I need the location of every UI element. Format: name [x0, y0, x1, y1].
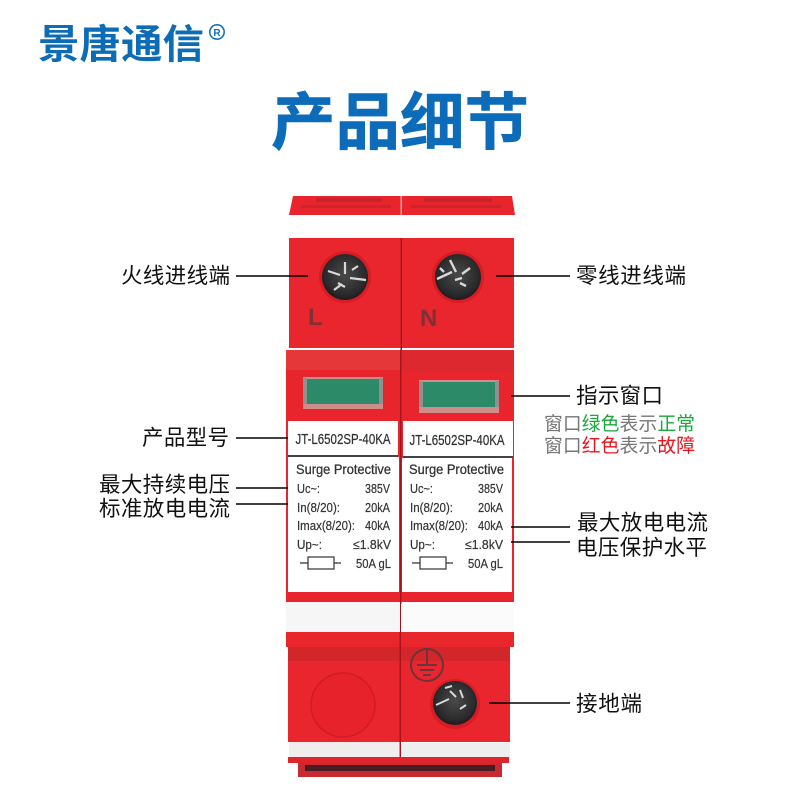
screw: ground terminal — [430, 679, 480, 729]
spec label: left: Imax(8/20): — [297, 518, 355, 533]
callout: 最大放电电流: 最大放电电流 — [577, 511, 708, 535]
logo: 景唐通信: 景唐通信 — [38, 23, 204, 67]
terminal letter L: L — [308, 304, 323, 331]
callout: 标准放电电流: 标准放电电流 — [99, 497, 230, 521]
spec label: left: 20kA — [365, 500, 390, 515]
callout: 零线进线端: 零线进线端 — [576, 264, 686, 288]
spec label: right: Up~: — [410, 537, 435, 552]
bottom ground module — [286, 632, 514, 777]
spec label: left: 40kA — [365, 518, 390, 533]
model label: left — [288, 421, 398, 457]
spec label: right: ≤1.8kV — [465, 537, 503, 552]
callout: 最大持续电压: 最大持续电压 — [99, 473, 230, 497]
logo: 景唐通信: R — [213, 28, 221, 39]
spec label: left — [288, 457, 399, 592]
screw: neutral terminal — [432, 251, 484, 303]
model label: right: JT-L6502SP-40KA — [410, 432, 504, 449]
model label: left: JT-L6502SP-40KA — [296, 431, 390, 448]
spec label: right: Uc~: — [410, 481, 433, 496]
spec label: right: In(8/20): — [410, 500, 453, 515]
top terminal module — [289, 196, 515, 350]
spec label: right: Surge Protective — [409, 461, 504, 477]
ground symbol — [411, 649, 443, 681]
spec label: right: 385V — [478, 481, 503, 496]
terminal letter N: N — [420, 305, 437, 332]
middle module — [286, 350, 514, 632]
spec label: left: 50A gL — [356, 556, 391, 571]
callout: 产品型号: 产品型号 — [142, 426, 229, 450]
spec label: left: In(8/20): — [297, 500, 340, 515]
spec label: right: 40kA — [478, 518, 503, 533]
product: surge protector device — [286, 196, 515, 777]
screw: live terminal — [319, 251, 371, 303]
spec label: right: 20kA — [478, 500, 503, 515]
indicator window: right — [419, 380, 499, 413]
note: window colour meaning — [544, 413, 695, 456]
spec label: right: Imax(8/20): — [410, 518, 468, 533]
spec label: left: 385V — [365, 481, 390, 496]
callout: 电压保护水平: 电压保护水平 — [576, 536, 707, 560]
callout: 接地端: 接地端 — [576, 692, 642, 716]
model label: right — [403, 421, 513, 458]
callout: 火线进线端: 火线进线端 — [121, 264, 230, 288]
title: 产品细节 — [271, 89, 529, 158]
spec label: right: 50A gL — [468, 556, 503, 571]
indicator window: left — [303, 377, 383, 409]
note: window colour meaning: 窗口红色表示故障 — [544, 435, 695, 456]
spec label: left: ≤1.8kV — [353, 537, 391, 552]
spec label: left: Uc~: — [297, 481, 320, 496]
spec label: left: Surge Protective — [296, 461, 391, 477]
callout: 指示窗口: 指示窗口 — [576, 384, 663, 408]
note: window colour meaning: 窗口绿色表示正常 — [544, 413, 695, 434]
spec label: right — [402, 458, 512, 592]
spec label: left: Up~: — [297, 537, 322, 552]
knockout circle — [311, 673, 375, 737]
